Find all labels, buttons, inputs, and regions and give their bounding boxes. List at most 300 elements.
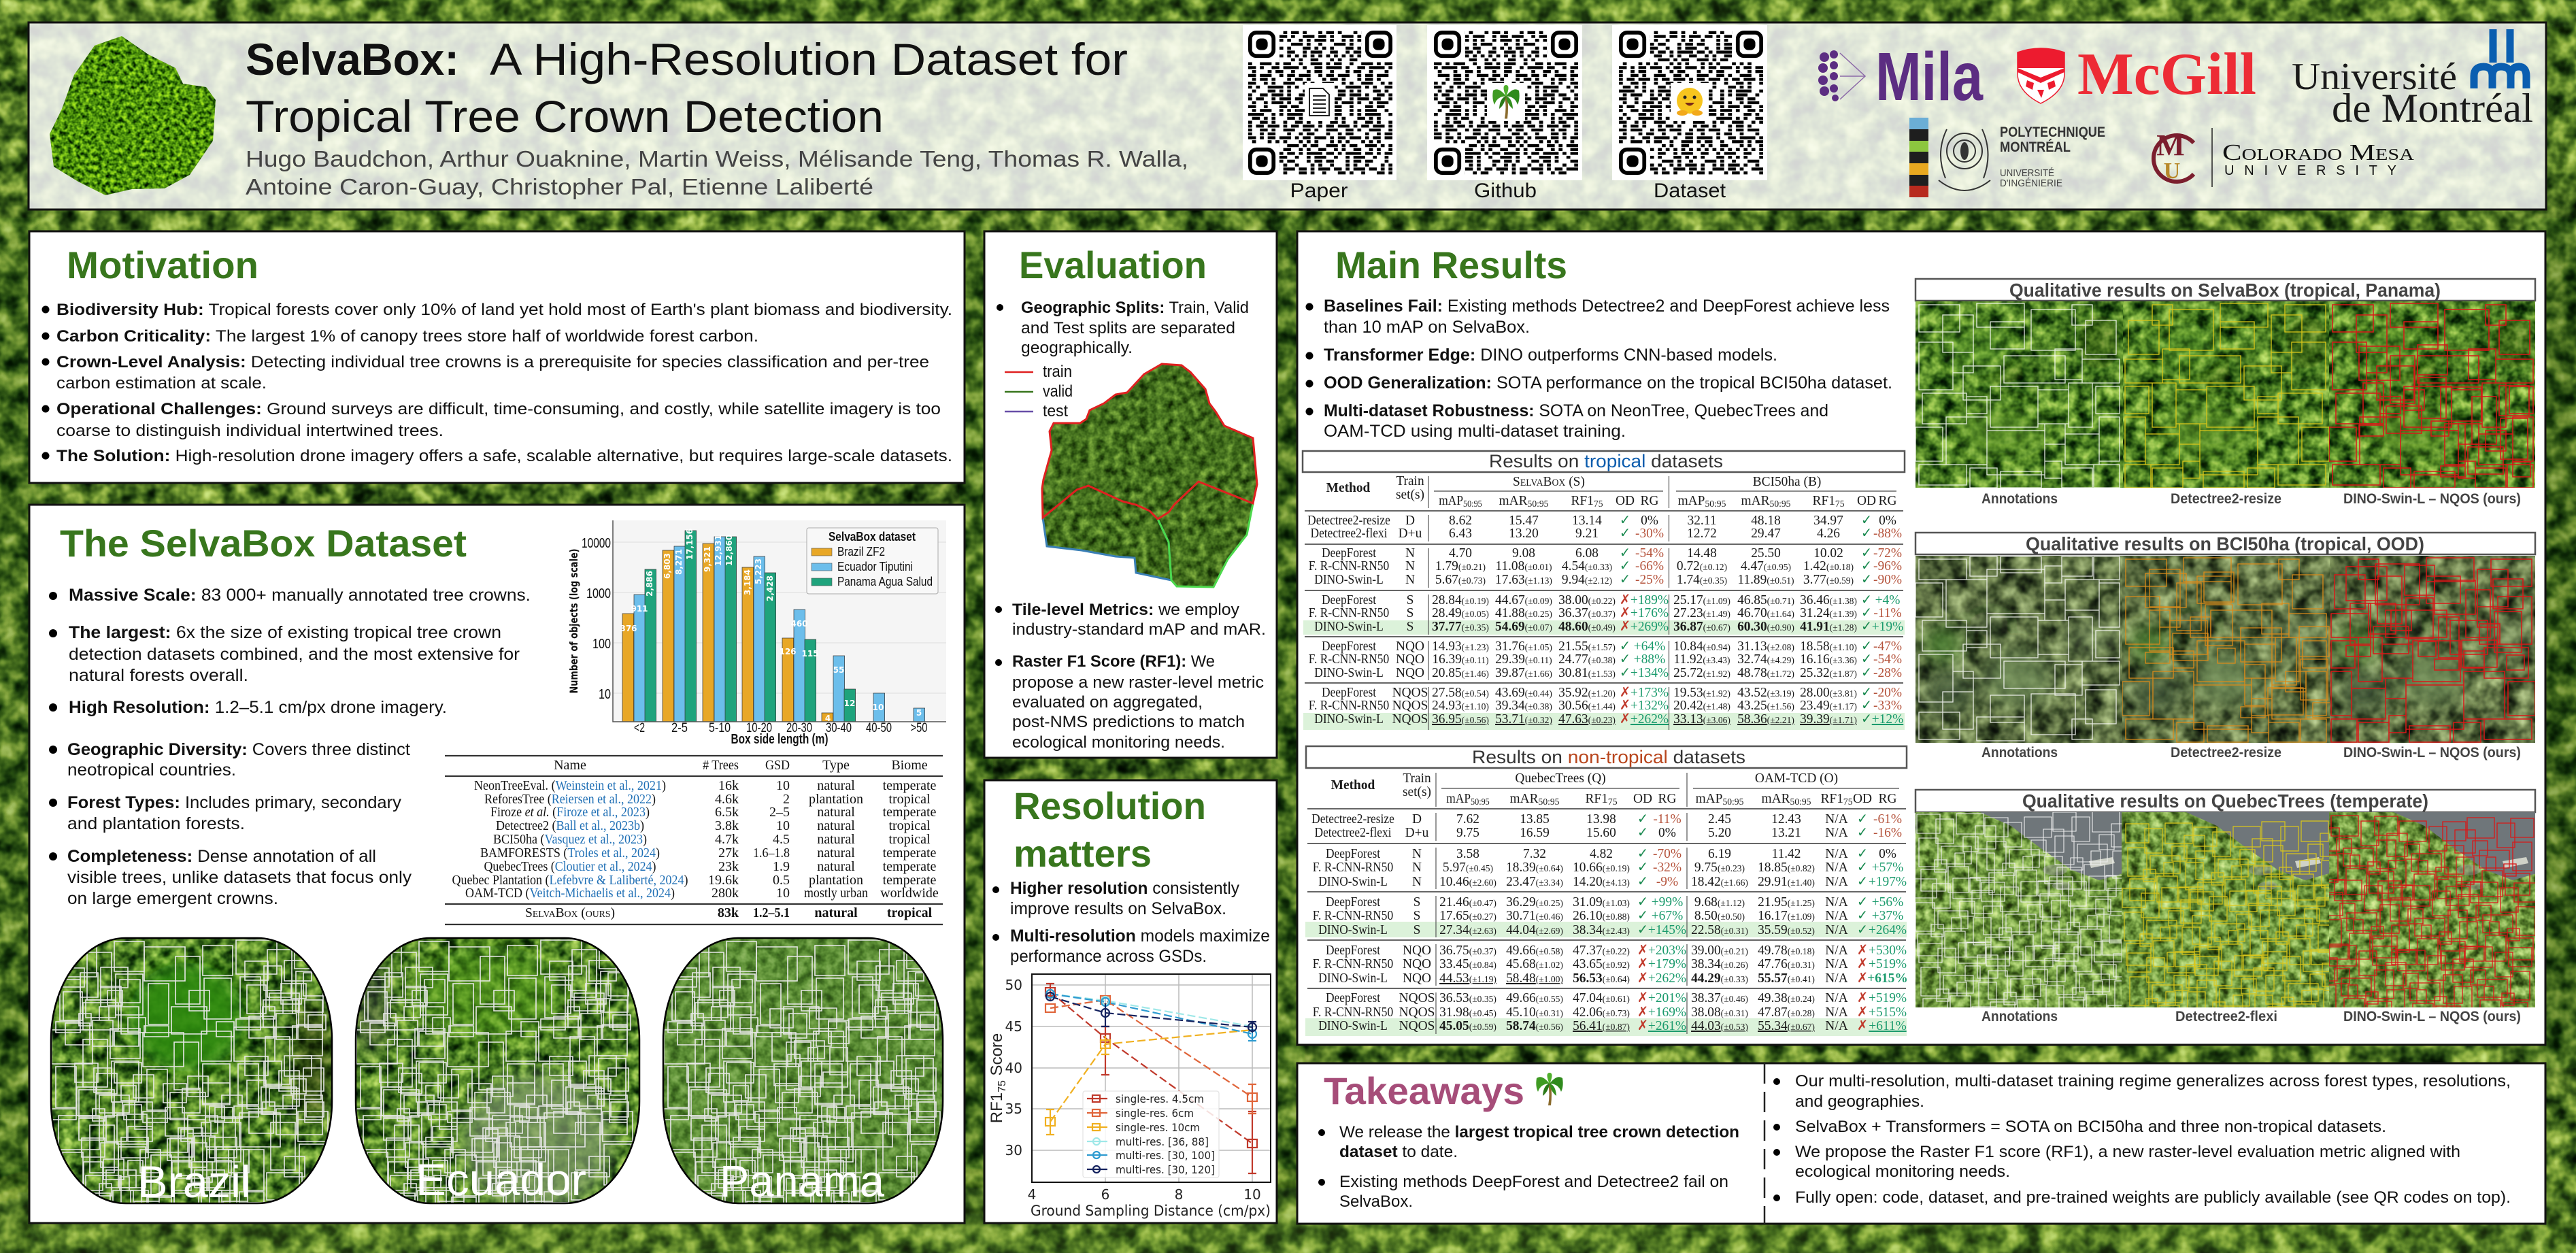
logo: Colorado Mesa University: Colorado Mesa: [2222, 140, 2415, 165]
results table: tropical datasets: -47%: [1873, 639, 1902, 654]
results table: non-tropical datasets: 44.04(±2.69): [1506, 922, 1563, 937]
logo: Colorado Mesa University: [2154, 128, 2415, 187]
results table: tropical datasets: 24.77(±0.38): [1558, 652, 1616, 667]
table: dataset comparison: mostly urban: [804, 886, 868, 901]
results table: non-tropical datasets: Train: [1403, 771, 1431, 786]
bar chart: objects by box side length: 376: [620, 624, 637, 633]
results table: tropical datasets: ✓: [1620, 545, 1630, 561]
bar chart: objects by box side length: 17,156: [685, 529, 695, 560]
results table: tropical datasets: 20.42(±1.48): [1673, 698, 1730, 713]
results table: tropical datasets: 13.14: [1572, 513, 1602, 528]
logo: Mila: Mila: [1875, 39, 1984, 115]
table: dataset comparison: plantation: [809, 873, 863, 888]
bar chart: objects by box side length: 10: [873, 703, 884, 712]
results table: tropical datasets: 9.21: [1575, 526, 1599, 541]
results table: tropical datasets: 6.43: [1449, 526, 1472, 541]
results table: non-tropical datasets: -16%: [1873, 825, 1902, 840]
results table: tropical datasets: NQO: [1396, 652, 1424, 667]
logo: Colorado Mesa University: U: [2164, 158, 2180, 184]
results table: tropical datasets: ✓: [1620, 651, 1630, 667]
qualitative results: BCI50ha: [1916, 533, 2537, 761]
bullet list: dataset: [49, 586, 531, 908]
results table: tropical datasets: 1.42(±0.18): [1803, 558, 1854, 573]
results table: tropical datasets: 75: [1835, 499, 1845, 509]
table: dataset comparison: natural: [817, 859, 855, 874]
results table: non-tropical datasets: ✓: [1857, 907, 1868, 923]
results table: non-tropical datasets: +264%: [1869, 922, 1907, 937]
results table: tropical datasets: Method: [1326, 480, 1370, 495]
results table: tropical datasets: -54%: [1635, 546, 1664, 561]
results table: tropical datasets: OD: [1857, 493, 1876, 508]
bullet list: main results: OAM-TCD using multi-dataset training.: [1324, 422, 1626, 441]
results table: non-tropical datasets: 75: [1843, 797, 1853, 807]
table: dataset comparison: 10: [776, 886, 790, 901]
results table: non-tropical datasets: 17.65(±0.27): [1439, 908, 1496, 923]
bullet: raster F1 score: [995, 652, 1264, 752]
results table: tropical datasets: NQO: [1396, 665, 1424, 680]
results table: tropical datasets: 50:95: [1770, 499, 1791, 509]
heading: resolution matters: [1014, 784, 1206, 875]
results table: tropical datasets: -30%: [1635, 526, 1664, 541]
results table: tropical datasets: 17.63(±1.13): [1495, 572, 1552, 587]
results table: non-tropical datasets: 23.47(±3.34): [1506, 874, 1563, 889]
results table: tropical datasets: ✓: [1620, 638, 1630, 654]
logo: Université de Montréal: [2292, 29, 2533, 131]
results table: non-tropical datasets: 0%: [1879, 846, 1896, 861]
results table: non-tropical datasets: ✓: [1857, 873, 1868, 889]
bar chart: objects by box side length: 30-40: [826, 721, 852, 735]
bar chart: objects by box side length: 2-5: [671, 721, 688, 735]
results table: tropical datasets: SelvaBox (S): [1513, 474, 1585, 489]
photo: Ecuador: [354, 938, 639, 1216]
panel: main results: [1297, 231, 2545, 1045]
bar chart: objects by box side length: [567, 520, 946, 747]
logo: Université de Montréal: de Montréal: [2332, 86, 2533, 131]
results table: non-tropical datasets: N: [1412, 846, 1422, 861]
results table: non-tropical datasets: 56.53(±0.64): [1573, 971, 1630, 986]
results table: non-tropical datasets: DINO-Swin-L: [1318, 922, 1388, 937]
results table: tropical datasets: mAP: [1678, 493, 1705, 508]
bar chart: objects by box side length: 5,223: [754, 558, 763, 584]
table: dataset comparison: natural: [814, 905, 858, 920]
results table: tropical datasets: 4.26: [1817, 526, 1840, 541]
panel: the SelvaBox dataset: [29, 505, 965, 1223]
results table: non-tropical datasets: 18.85(±0.82): [1758, 860, 1815, 875]
table: dataset comparison: 280k: [712, 886, 739, 901]
results table: tropical datasets: NQO: [1396, 639, 1424, 654]
bullet: tile-level metrics: Tile-level Metrics: we employ: [1012, 601, 1239, 619]
results table: non-tropical datasets: OD: [1633, 791, 1652, 806]
results table: non-tropical datasets: 31.09(±1.03): [1573, 895, 1630, 909]
table: dataset comparison: Detectree2 (Ball et al., 2023b): [496, 818, 644, 833]
results table: tropical datasets: 47.63(±0.23): [1558, 712, 1616, 726]
results table: non-tropical datasets: 13.21: [1771, 825, 1801, 840]
results table: tropical datasets: 41.88(±0.25): [1495, 605, 1552, 620]
bullet list: motivation: coarse to distinguish individual intertwined trees.: [56, 422, 444, 440]
results table: tropical datasets: 50:95: [1705, 499, 1726, 509]
table: dataset comparison: Firoze et al. (Firoze et al., 2023): [490, 805, 650, 820]
results table: non-tropical datasets: 38.08(±0.31): [1691, 1005, 1748, 1020]
line chart: RF1 vs ground sampling distance: 50: [1005, 977, 1022, 993]
results table: tropical datasets: 1.79(±0.21): [1435, 558, 1486, 573]
results table: tropical datasets: ✓: [1861, 697, 1872, 713]
results table: non-tropical datasets: QuebecTrees (Q): [1515, 771, 1606, 786]
bullets: takeaways right: [1773, 1072, 2511, 1207]
results table: non-tropical datasets: 35.59(±0.52): [1758, 922, 1815, 937]
results table: non-tropical datasets: ✗: [1857, 990, 1868, 1005]
results table: non-tropical datasets: mAP: [1446, 791, 1471, 806]
table: dataset comparison: Name: [554, 758, 586, 773]
qualitative results: BCI50ha: Qualitative results on BCI50ha (tropical, OOD): [2026, 533, 2424, 554]
results table: tropical datasets: ✓: [1620, 665, 1630, 680]
results table: tropical datasets: ✓: [1861, 651, 1872, 667]
results table: non-tropical datasets: +519%: [1869, 956, 1907, 971]
results table: non-tropical datasets: [1305, 771, 1908, 1036]
logo: Polytechnique Montréal: POLYTECHNIQUE: [2000, 124, 2105, 140]
line chart: RF1 vs ground sampling distance: 4: [1028, 1186, 1036, 1203]
results table: non-tropical datasets: +611%: [1869, 1018, 1907, 1033]
results table: non-tropical datasets: +56%: [1872, 895, 1903, 909]
line chart: RF1 vs ground sampling distance: 45: [1005, 1018, 1022, 1035]
results table: non-tropical datasets: 49.78(±0.18): [1758, 943, 1815, 958]
results table: tropical datasets: 9.94(±2.12): [1562, 572, 1612, 587]
results table: tropical datasets: 75: [1594, 499, 1603, 509]
results table: tropical datasets: 14.93(±1.23): [1432, 639, 1489, 654]
results table: non-tropical datasets: N: [1412, 860, 1422, 875]
results table: non-tropical datasets: 38.37(±0.46): [1691, 990, 1748, 1005]
results table: non-tropical datasets: +261%: [1648, 1018, 1686, 1033]
results table: non-tropical datasets: ✓: [1637, 859, 1648, 875]
table: dataset comparison: BAMFORESTS (Troles et al., 2024): [480, 846, 660, 861]
results table: non-tropical datasets: N/A: [1825, 812, 1848, 826]
results table: tropical datasets: 28.49(±0.05): [1432, 605, 1489, 620]
results table: non-tropical datasets: RF1: [1821, 791, 1843, 806]
results table: tropical datasets: 50:95: [1528, 499, 1549, 509]
results table: tropical datasets: 31.13(±2.08): [1737, 639, 1794, 654]
heading: resolution matters: matters: [1014, 832, 1152, 875]
results table: non-tropical datasets: +201%: [1648, 990, 1686, 1005]
results table: tropical datasets: ✓: [1620, 512, 1630, 528]
bullet list: motivation: Carbon Criticality: The largest 1% of canopy trees store half of worldwide forest carbon.: [56, 327, 758, 346]
panel: takeaways: [1297, 1063, 2545, 1224]
results table: tropical datasets: ✓: [1861, 618, 1872, 634]
bar chart: objects by box side length: 460: [790, 619, 808, 629]
line chart: RF1 vs ground sampling distance: 35: [1005, 1101, 1022, 1117]
heading: motivation: Motivation: [67, 244, 258, 286]
results table: tropical datasets: 10.02: [1813, 546, 1843, 561]
results table: non-tropical datasets: +99%: [1652, 895, 1683, 909]
results table: tropical datasets: BCI50ha (B): [1753, 474, 1821, 489]
results table: tropical datasets: ✗: [1620, 711, 1630, 726]
results table: tropical datasets: -25%: [1635, 572, 1664, 587]
chart legend: SelvaBox dataset: [829, 530, 916, 544]
image: DINO, QuebecTrees: [2317, 812, 2537, 1029]
results table: tropical datasets: ✓: [1861, 512, 1872, 528]
chart legend: Ecuador Tiputini: [837, 560, 913, 573]
results table: tropical datasets: ✓: [1861, 571, 1872, 587]
results table: tropical datasets: 29.47: [1751, 526, 1781, 541]
results table: tropical datasets: 36.87(±0.67): [1673, 619, 1730, 634]
results table: non-tropical datasets: 47.37(±0.22): [1573, 943, 1630, 958]
results table: non-tropical datasets: D+u: [1405, 825, 1428, 840]
results table: tropical datasets: +176%: [1630, 605, 1669, 620]
results table: non-tropical datasets: ✗: [1857, 1004, 1868, 1020]
results table: non-tropical datasets: DeepForest: [1326, 895, 1381, 909]
results table: tropical datasets: F. R-CNN-RN50: [1309, 558, 1389, 573]
results table: tropical datasets: -11%: [1873, 605, 1902, 620]
line chart: RF1 vs ground sampling distance: 10: [1243, 1186, 1261, 1203]
results table: tropical datasets: S: [1407, 592, 1414, 607]
line chart: RF1 vs ground sampling distance: 40: [1005, 1060, 1022, 1076]
results table: non-tropical datasets: -11%: [1653, 812, 1682, 826]
results table: tropical datasets: 60.30(±0.90): [1737, 619, 1794, 634]
photo: Panama: Panama: [720, 1156, 884, 1206]
results table: tropical datasets: -54%: [1873, 652, 1902, 667]
image: annotations, QuebecTrees: [1913, 812, 2134, 1025]
results table: non-tropical datasets: +67%: [1652, 908, 1683, 923]
results table: non-tropical datasets: 16.59: [1520, 825, 1550, 840]
results table: tropical datasets: N: [1405, 546, 1415, 561]
results table: tropical datasets: 16.16(±3.36): [1800, 652, 1857, 667]
results table: tropical datasets: Detectree2-flexi: [1311, 526, 1387, 541]
results table: non-tropical datasets: +179%: [1648, 956, 1686, 971]
bullet list: dataset: detection datasets combined, and the most extensive for: [69, 645, 520, 664]
table: dataset comparison: 10: [776, 778, 790, 793]
table: dataset comparison: natural: [817, 778, 855, 793]
bullet: tile-level metrics: industry-standard mAP and mAR.: [1012, 620, 1266, 639]
results table: tropical datasets: ✗: [1620, 618, 1630, 634]
captions: SelvaBox: DINO-Swin-L – NQOS (ours): [2343, 491, 2521, 507]
results table: non-tropical datasets: +530%: [1869, 943, 1907, 958]
table: dataset comparison: natural: [817, 805, 855, 820]
results table: non-tropical datasets: 3.58: [1456, 846, 1479, 861]
results table: non-tropical datasets: 22.58(±0.31): [1691, 922, 1748, 937]
bar chart: objects by box side length: 4: [825, 714, 831, 723]
results table: non-tropical datasets: 14.20(±4.13): [1573, 874, 1630, 889]
results table: non-tropical datasets: D: [1412, 812, 1422, 826]
QR code: Github: [1427, 25, 1582, 202]
results table: non-tropical datasets: N/A: [1825, 971, 1848, 986]
bullet list: dataset: Geographic Diversity: Covers three distinct: [67, 740, 410, 759]
results table: non-tropical datasets: 21.95(±1.25): [1758, 895, 1815, 909]
results table: tropical datasets: 31.24(±1.39): [1800, 605, 1857, 620]
legend: train/valid/test: train: [1043, 363, 1072, 381]
results table: tropical datasets: DeepForest: [1322, 592, 1377, 607]
results table: non-tropical datasets: 13.98: [1586, 812, 1616, 826]
line chart legend: multi-res. [36, 88]: [1116, 1135, 1209, 1148]
bullet list: motivation: carbon estimation at scale.: [56, 374, 267, 392]
qualitative results: QuebecTrees: [1913, 790, 2537, 1035]
results table: tropical datasets: 16.39(±0.11): [1432, 652, 1489, 667]
results table: tropical datasets: 50:95: [1463, 498, 1482, 509]
results table: non-tropical datasets: ✓: [1637, 907, 1648, 923]
QR code: Github: Github: [1474, 180, 1537, 202]
results table: non-tropical datasets: ✗: [1857, 1018, 1868, 1033]
results table: non-tropical datasets: 4.82: [1590, 846, 1613, 861]
results table: non-tropical datasets: 5.20: [1708, 825, 1731, 840]
results table: tropical datasets: 28.84(±0.19): [1432, 592, 1489, 607]
results table: non-tropical datasets: 47.76(±0.31): [1758, 956, 1815, 971]
table: dataset comparison: plantation: [809, 792, 863, 807]
results table: non-tropical datasets: N/A: [1825, 1018, 1848, 1033]
line chart: RF1 vs ground sampling distance: [988, 974, 1271, 1219]
bullet list: motivation: The Solution: High-resolution drone imagery offers a safe, scalable alternative, but requires large-scale datasets.: [56, 447, 952, 465]
bullet list: dataset: visible trees, unlike datasets that focus only: [67, 868, 412, 887]
results table: tropical datasets: 53.71(±0.32): [1495, 712, 1552, 726]
bullet: raster F1 score: post-NMS predictions to match: [1012, 713, 1245, 731]
results table: non-tropical datasets: DINO-Swin-L: [1318, 1018, 1388, 1033]
results table: tropical datasets: 12.72: [1687, 526, 1717, 541]
results table: non-tropical datasets: 50:95: [1471, 796, 1490, 807]
table: dataset comparison: 4.5: [773, 832, 790, 847]
results table: tropical datasets: D: [1405, 513, 1415, 528]
captions: QuebecTrees: Detectree2-flexi: [2175, 1009, 2277, 1024]
results table: tropical datasets: 15.47: [1509, 513, 1539, 528]
bar chart: objects by box side length: 100: [592, 637, 611, 652]
results table: non-tropical datasets: 27.34(±2.63): [1439, 922, 1496, 937]
results table: tropical datasets: -28%: [1873, 665, 1902, 680]
results table: tropical datasets: -90%: [1873, 572, 1902, 587]
panel: motivation: [29, 231, 965, 483]
results table: tropical datasets: NQOS: [1392, 712, 1428, 726]
results table: non-tropical datasets: 38.34(±0.26): [1691, 956, 1748, 971]
results table: tropical datasets: +269%: [1630, 619, 1669, 634]
table: dataset comparison: # Trees: [703, 758, 739, 773]
results table: non-tropical datasets: 29.91(±1.40): [1758, 874, 1815, 889]
results table: tropical datasets: 25.50: [1751, 546, 1781, 561]
results table: non-tropical datasets: 5.97(±0.45): [1443, 860, 1493, 875]
bullets: resolution: Higher resolution consistently: [1010, 879, 1239, 898]
results table: non-tropical datasets: ✓: [1637, 894, 1648, 909]
results table: non-tropical datasets: ✓: [1857, 824, 1868, 840]
results table: non-tropical datasets: N/A: [1825, 922, 1848, 937]
results table: non-tropical datasets: Detectree2-resize: [1311, 812, 1394, 826]
bullets: takeaways right: and geographies.: [1795, 1092, 1924, 1111]
image: DINO, SelvaBox: [2329, 301, 2535, 488]
line chart legend: single-res. 10cm: [1116, 1121, 1200, 1134]
results table: non-tropical datasets: +37%: [1872, 908, 1903, 923]
bar chart: objects by box side length: 40-50: [866, 721, 892, 735]
table: dataset comparison: natural: [817, 818, 855, 833]
results table: tropical datasets: 36.95(±0.56): [1432, 712, 1489, 726]
results table: non-tropical datasets: 75: [1608, 797, 1618, 807]
results table: tropical datasets: 6.08: [1575, 546, 1599, 561]
results table: non-tropical datasets: 30.71(±0.46): [1506, 908, 1563, 923]
bullets: takeaways right: We propose the Raster F1 score (RF1), a new raster-level evaluation metric aligned with: [1795, 1143, 2460, 1161]
results table: non-tropical datasets: S: [1414, 895, 1420, 909]
line chart: RF1 vs ground sampling distance: 30: [1005, 1142, 1022, 1158]
results table: tropical datasets: 0%: [1879, 513, 1896, 528]
results table: tropical datasets: +19%: [1872, 619, 1903, 634]
table: dataset comparison: Type: [822, 758, 850, 773]
line chart legend: multi-res. [30, 100]: [1116, 1149, 1215, 1162]
results table: non-tropical datasets: 49.66(±0.55): [1506, 990, 1563, 1005]
results table: non-tropical datasets: ✗: [1857, 942, 1868, 958]
results table: non-tropical datasets: S: [1414, 922, 1420, 937]
results table: non-tropical datasets: N/A: [1825, 895, 1848, 909]
chart legend: [807, 528, 938, 594]
results table: tropical datasets: 10.84(±0.94): [1673, 639, 1730, 654]
results table: tropical datasets: S: [1407, 605, 1414, 620]
bar chart: objects by box side length: 10-20: [746, 721, 772, 735]
header banner: [29, 22, 2546, 210]
results table: tropical datasets: ✗: [1620, 697, 1630, 713]
results table: non-tropical datasets: NQO: [1403, 971, 1431, 986]
results table: non-tropical datasets: N/A: [1825, 990, 1848, 1005]
bullet list: main results: Multi-dataset Robustness: SOTA on NeonTree, QuebecTrees and: [1324, 401, 1828, 420]
results table: tropical datasets: DINO-Swin-L: [1314, 665, 1384, 680]
results table: tropical datasets: -66%: [1635, 558, 1664, 573]
captions: BCI50ha: Annotations: [1981, 745, 2058, 761]
results table: tropical datasets: 32.11: [1688, 513, 1716, 528]
results table: non-tropical datasets: 47.87(±0.28): [1758, 1005, 1815, 1020]
results table: non-tropical datasets: 36.75(±0.37): [1439, 943, 1496, 958]
line chart legend: single-res. 6cm: [1116, 1107, 1194, 1120]
results table: tropical datasets: 27.23(±1.49): [1673, 605, 1730, 620]
results table: tropical datasets: 4.70: [1449, 546, 1472, 561]
qualitative results: QuebecTrees: Qualitative results on QuebecTrees (temperate): [2022, 790, 2428, 812]
table: dataset comparison: natural: [817, 846, 855, 861]
results table: non-tropical datasets: 6.19: [1708, 846, 1731, 861]
logo: McGill: McGill: [2077, 41, 2256, 107]
results table: non-tropical datasets: +169%: [1648, 1005, 1686, 1020]
results table: tropical datasets: -72%: [1873, 546, 1902, 561]
results table: tropical datasets: DINO-Swin-L: [1314, 712, 1384, 726]
results table: non-tropical datasets: N/A: [1825, 943, 1848, 958]
table: dataset comparison: 2–5: [769, 805, 790, 820]
results table: non-tropical datasets: OD: [1853, 791, 1872, 806]
bullets: takeaways left: dataset to date.: [1339, 1143, 1458, 1161]
table: dataset comparison: 10: [776, 818, 790, 833]
photo: Brazil: Brazil: [137, 1156, 251, 1207]
results table: non-tropical datasets: N/A: [1825, 1005, 1848, 1020]
results table: tropical datasets: -96%: [1873, 558, 1902, 573]
results table: tropical datasets: DeepForest: [1322, 639, 1377, 654]
heading: main results: Main Results: [1335, 244, 1567, 286]
bullet list: dataset: neotropical countries.: [67, 761, 236, 780]
results table: tropical datasets: ✗: [1620, 684, 1630, 700]
table heading: results on tropical datasets: Results on tropical datasets: [1489, 451, 1723, 471]
results table: tropical datasets: Detectree2-resize: [1307, 513, 1390, 528]
legend: train/valid/test: test: [1043, 402, 1068, 420]
results table: tropical datasets: DeepForest: [1322, 546, 1377, 561]
photo: Panama: [663, 938, 943, 1216]
results table: non-tropical datasets: OAM-TCD (O): [1755, 771, 1838, 786]
bar chart: objects by box side length: 5-10: [709, 721, 731, 735]
bullets: takeaways right: Fully open: code, dataset, and pre-trained weights are publicly available (see QR codes on top).: [1795, 1188, 2511, 1207]
results table: non-tropical datasets: ✗: [1857, 956, 1868, 971]
bar chart: objects by box side length: >50: [910, 721, 928, 735]
results table: tropical datasets: 32.74(±4.29): [1737, 652, 1794, 667]
captions: SelvaBox: Detectree2-resize: [2171, 491, 2281, 507]
results table: non-tropical datasets: N/A: [1825, 825, 1848, 840]
legend: train/valid/test: [1005, 363, 1073, 420]
results table: non-tropical datasets: F. R-CNN-RN50: [1313, 908, 1393, 923]
results table: non-tropical datasets: +197%: [1869, 874, 1907, 889]
table: dataset comparison: 19.6k: [708, 873, 739, 888]
bullets: takeaways left: We release the largest tropical tree crown detection: [1339, 1123, 1739, 1141]
results table: tropical datasets: 1.74(±0.35): [1677, 572, 1727, 587]
table: dataset comparison: 2: [783, 792, 790, 807]
results table: tropical datasets: 39.39(±1.71): [1800, 712, 1857, 726]
results table: non-tropical datasets: F. R-CNN-RN50: [1313, 860, 1393, 875]
captions: BCI50ha: Detectree2-resize: [2171, 745, 2281, 761]
bullet: raster F1 score: ecological monitoring needs.: [1012, 733, 1225, 752]
results table: non-tropical datasets: -32%: [1653, 860, 1682, 875]
bullets: takeaways left: SelvaBox.: [1339, 1192, 1413, 1211]
results table: tropical datasets: OD: [1616, 493, 1635, 508]
results table: tropical datasets: N: [1405, 558, 1415, 573]
